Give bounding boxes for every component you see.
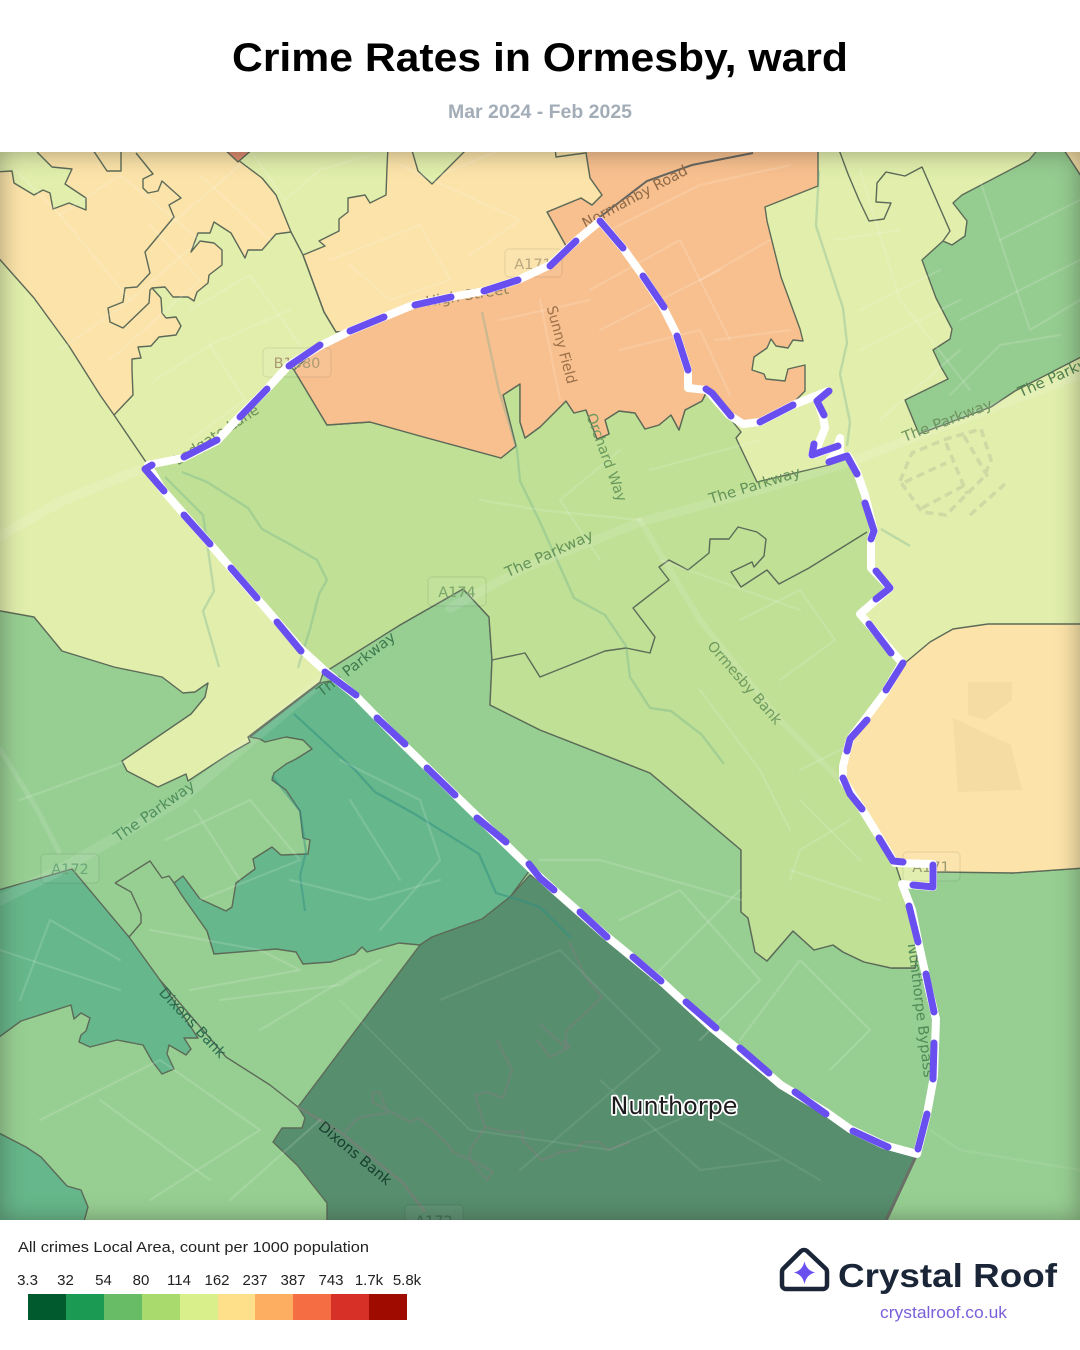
subtitle: date range: Mar 2024 - Feb 2025 bbox=[448, 102, 632, 123]
road labels: Orchard Way bbox=[582, 411, 629, 504]
legend colour scale bbox=[28, 1294, 407, 1320]
area: red sliver bbox=[226, 152, 250, 163]
legend values: 5.8k bbox=[393, 1272, 422, 1289]
legend title: All crimes Local Area, count per 1000 population bbox=[18, 1239, 369, 1256]
road labels: The Parkway bbox=[313, 629, 399, 701]
road labels: Dixons Bank bbox=[315, 1119, 395, 1189]
ward boundary: white casing with purple dashes bbox=[145, 221, 936, 1154]
legend values: 114 bbox=[167, 1272, 191, 1289]
legend values: 80 bbox=[133, 1272, 149, 1289]
logo: Crystal Roof bbox=[782, 1250, 1058, 1322]
road sign A171 north: A171 bbox=[514, 257, 552, 273]
road labels: Ladgate Lane bbox=[171, 402, 262, 469]
legend values bbox=[17, 1272, 422, 1289]
legend values: 162 bbox=[204, 1272, 230, 1289]
area: green northeast bbox=[905, 147, 1080, 434]
farmland patches in pale orange east bbox=[953, 682, 1022, 792]
road sign A174 bbox=[428, 577, 486, 606]
wordmark: Crystal Roof bbox=[838, 1257, 1058, 1294]
road labels bbox=[110, 163, 1080, 1189]
road labels: Normanby Road bbox=[580, 163, 691, 232]
grey walkways in Nunthorpe bbox=[345, 942, 630, 1180]
road sign B1380: B1380 bbox=[274, 356, 320, 372]
icon: house with star bbox=[782, 1250, 827, 1289]
website: crystalroof.co.uk bbox=[880, 1304, 1008, 1322]
area: yellow-green ward bbox=[148, 365, 919, 968]
area: yellow-green corner patch bbox=[0, 147, 86, 210]
road sign B1380 bbox=[263, 348, 331, 377]
road labels: The Parkway bbox=[502, 528, 596, 581]
road sign A171 east: A171 bbox=[912, 860, 950, 876]
area: darker green west bbox=[0, 869, 198, 1074]
road sign A171 east bbox=[903, 852, 960, 881]
road labels: High Street bbox=[425, 282, 510, 311]
legend values: 1.7k bbox=[355, 1272, 384, 1289]
road sign A172 west bbox=[41, 854, 99, 883]
legend values: 387 bbox=[280, 1272, 306, 1289]
road sign A172 south: A172 bbox=[415, 1214, 453, 1230]
legend values: 3.3 bbox=[17, 1272, 38, 1289]
road sign A171 north bbox=[505, 249, 562, 277]
road sign A172 west: A172 bbox=[51, 862, 89, 878]
road sign A174: A174 bbox=[438, 585, 476, 601]
legend bbox=[17, 1239, 422, 1320]
title: Crime Rates in Ormesby, ward bbox=[232, 36, 848, 80]
legend values: 743 bbox=[318, 1272, 344, 1289]
area: darker green centre bbox=[174, 680, 530, 964]
area: darker green southwest corner bbox=[0, 1131, 88, 1225]
legend values: 32 bbox=[57, 1272, 74, 1289]
road labels: Ormesby Bank bbox=[704, 639, 785, 729]
area: pale orange north centre bbox=[303, 147, 602, 332]
area: darkest green Nunthorpe bbox=[273, 875, 917, 1225]
area: mid green south bbox=[0, 589, 1080, 1225]
area: pale orange northwest bbox=[0, 147, 291, 415]
road labels: Dixons Bank bbox=[155, 985, 229, 1062]
road sign A172 south bbox=[404, 1204, 464, 1220]
legend values: 237 bbox=[242, 1272, 268, 1289]
area: orange north bbox=[294, 147, 818, 458]
place label: Nunthorpe: Nunthorpe bbox=[610, 1092, 738, 1120]
legend values: 54 bbox=[95, 1272, 112, 1289]
area: pale orange corner northeast bbox=[1064, 152, 1080, 176]
map edge vignette bbox=[0, 152, 1080, 1220]
roads bbox=[0, 150, 1080, 1200]
road labels: Sunny Field bbox=[543, 304, 579, 386]
road labels: The Parkway bbox=[706, 465, 803, 508]
road labels: Nunthorpe Bypass bbox=[904, 943, 936, 1078]
streams bbox=[165, 171, 910, 938]
internal boundary lines bbox=[91, 147, 950, 1225]
area: pale orange east bbox=[843, 624, 1080, 873]
railway-like dotted track east bbox=[900, 429, 1005, 515]
road labels: The Parkway bbox=[899, 397, 995, 446]
road labels: The Parkway bbox=[110, 778, 199, 846]
